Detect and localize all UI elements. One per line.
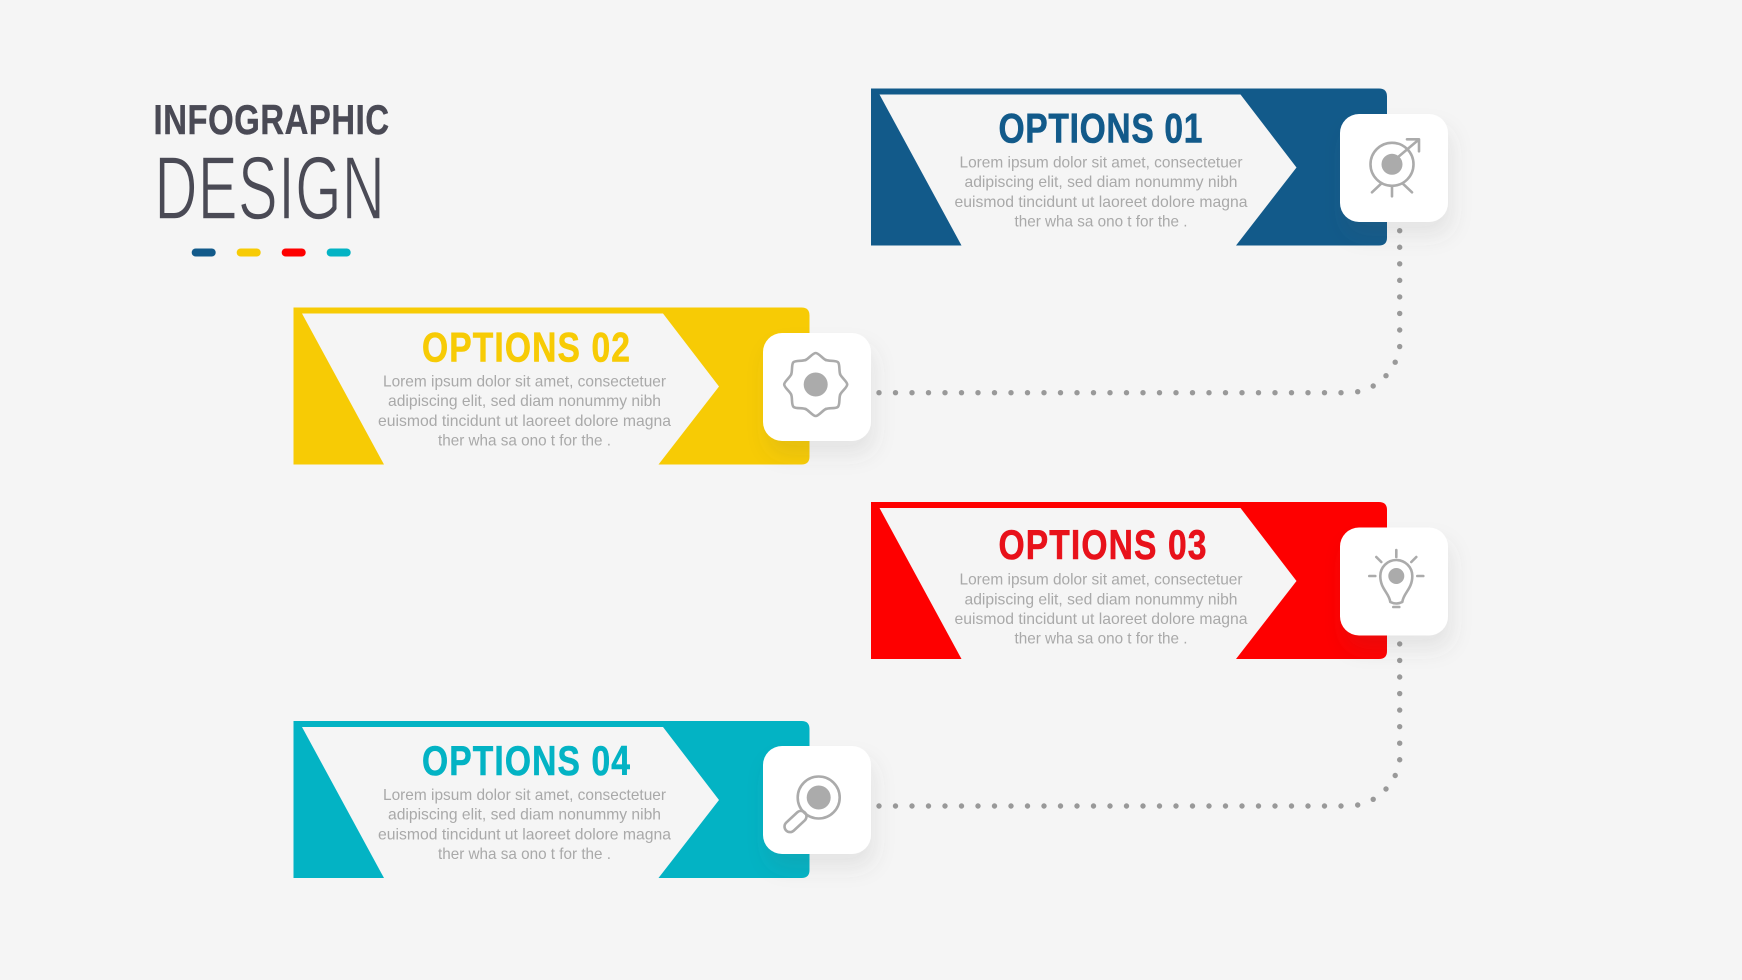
body text: euismod tincidunt ut laoreet dolore magna	[378, 413, 671, 430]
body text: Lorem ipsum dolor sit amet, consectetuer	[383, 787, 667, 804]
panel background	[871, 502, 1387, 659]
body text: adipiscing elit, sed diam nonummy nibh	[388, 393, 661, 410]
body text	[378, 787, 671, 863]
heading: OPTIONS 03	[998, 523, 1207, 569]
body text	[954, 572, 1248, 648]
body text	[954, 154, 1248, 230]
title line: design: DESIGN	[154, 139, 385, 239]
body text: adipiscing elit, sed diam nonummy nibh	[388, 807, 661, 824]
body text: Lorem ipsum dolor sit amet, consectetuer	[960, 572, 1243, 589]
heading: OPTIONS 02	[422, 325, 630, 371]
body text: euismod tincidunt ut laoreet dolore magna	[954, 611, 1248, 628]
body text: euismod tincidunt ut laoreet dolore magna	[954, 194, 1248, 211]
body text: Lorem ipsum dolor sit amet, consectetuer	[383, 374, 667, 390]
dotted connector: option 2 to option 1	[879, 231, 1400, 394]
heading: OPTIONS 04	[422, 739, 630, 785]
colour key pills	[192, 248, 351, 256]
arrow label shape	[302, 727, 719, 878]
body text: ther wha sa ono t for the .	[1014, 631, 1188, 648]
body text: ther wha sa ono t for the .	[438, 432, 611, 450]
body text: euismod tincidunt ut laoreet dolore magna	[378, 826, 671, 843]
icon tile	[763, 746, 871, 854]
panel: options 01	[871, 88, 1448, 246]
icon: magnifier	[782, 776, 840, 834]
panel: options 02	[294, 308, 871, 464]
title line: infographic: INFOGRAPHIC	[154, 96, 389, 143]
panel: options 04	[294, 721, 871, 878]
panel background	[294, 308, 810, 464]
heading: OPTIONS 01	[998, 106, 1203, 152]
arrow label shape	[880, 94, 1296, 246]
body text: ther wha sa ono t for the .	[1014, 214, 1188, 230]
icon: target with arrow	[1370, 139, 1419, 196]
body text: Lorem ipsum dolor sit amet, consectetuer	[960, 154, 1243, 172]
body text: adipiscing elit, sed diam nonummy nibh	[964, 174, 1238, 191]
icon: gear	[784, 353, 847, 416]
body text	[378, 374, 671, 450]
icon tile	[763, 333, 871, 441]
body text: adipiscing elit, sed diam nonummy nibh	[964, 591, 1238, 608]
title	[154, 96, 389, 256]
body text: ther wha sa ono t for the .	[438, 846, 611, 863]
arrow label shape	[880, 508, 1296, 659]
arrow label shape	[302, 314, 719, 464]
icon tile	[1340, 114, 1448, 222]
panel: options 03	[871, 502, 1448, 659]
icon tile	[1340, 528, 1448, 636]
dotted connector: option 4 to option 3	[879, 644, 1400, 808]
panel background	[871, 88, 1387, 246]
icon: light bulb	[1369, 550, 1423, 607]
panel background	[294, 721, 810, 878]
